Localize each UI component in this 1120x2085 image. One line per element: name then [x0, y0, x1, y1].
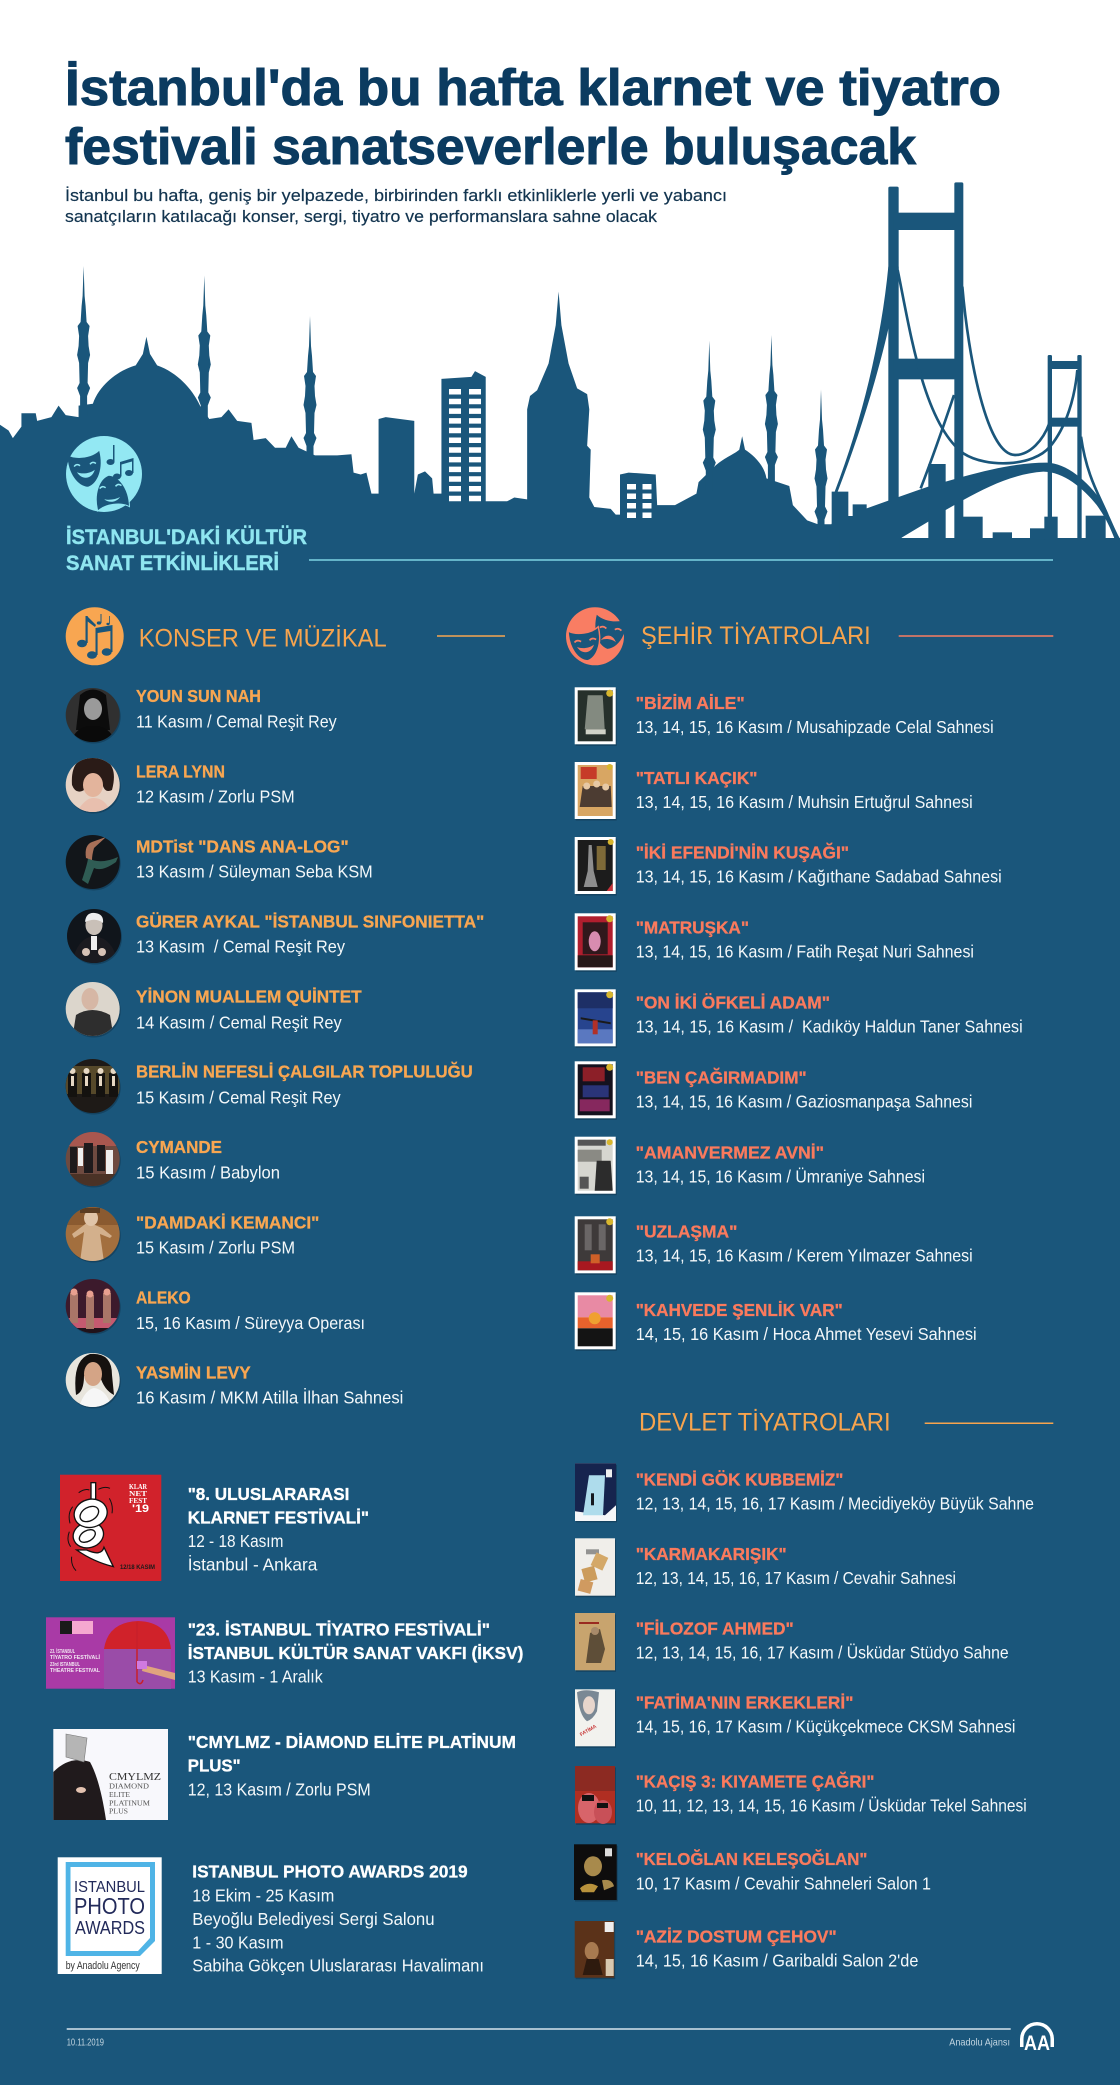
poster: clarinet festival [60, 1475, 161, 1581]
main section heading [66, 526, 1053, 575]
Bosphorus bridge [827, 182, 1120, 540]
item: Lera Lynn: 12 Kasım / Zorlu PSM [136, 786, 295, 806]
building windows [455, 389, 647, 522]
title [65, 59, 1001, 175]
item: Bizim Aile: "BİZİM AİLE" [636, 693, 745, 713]
item: Keloğlan Keleşoğlan [636, 1848, 931, 1893]
item: Aleko: ALEKO [136, 1287, 191, 1307]
item: Uzlaşma [636, 1222, 973, 1266]
poster: Istanbul theatre festival: 23. İSTANBUL [50, 1648, 75, 1655]
item: Berlin wind ensemble: 15 Kasım / Cemal Reşit Rey [136, 1087, 341, 1107]
photo: MDTist [64, 833, 122, 891]
item: Karmakarışık [636, 1544, 956, 1588]
photo: Cymande [64, 1130, 122, 1188]
text: CMYLMZ: "CMYLMZ - DİAMOND ELİTE PLATİNUM [188, 1732, 516, 1752]
item: Aleko [136, 1287, 365, 1333]
poster: On İki Öfkeli Adam [575, 989, 617, 1048]
item: Ben Çağırmadım: 13, 14, 15, 16 Kasım / Gaziosmanpaşa Sahnesi [636, 1092, 972, 1112]
logo: Istanbul Photo Awards: ISTANBUL [74, 1879, 145, 1896]
poster: Keloğlan Keleşoğlan [574, 1844, 618, 1902]
poster: Aziz Dostum Çehov [575, 1921, 615, 1979]
poster: Uzlaşma [575, 1216, 617, 1275]
item: Kendi Gök Kubbemiz: "KENDİ GÖK KUBBEMİZ" [636, 1469, 843, 1489]
item: Lera Lynn: LERA LYNN [136, 761, 225, 781]
intro text: İstanbul bu hafta, geniş bir yelpazede, birbirinden farklı etkinliklerle yerli ve yabancı [65, 186, 727, 205]
poster: CMYLMZ: PLATINUM [109, 1798, 150, 1808]
item: Kaçış 3 [636, 1771, 1027, 1816]
poster: Istanbul theatre festival: TİYATRO FESTİVALİ [50, 1654, 101, 1661]
item: Aziz Dostum Çehov: "AZİZ DOSTUM ÇEHOV" [636, 1927, 837, 1947]
poster: Istanbul theatre festival: THEATRE FESTIVAL [50, 1668, 100, 1674]
item: Tatlı Kaçık [636, 768, 973, 812]
item: İki Efendi: 13, 14, 15, 16 Kasım / Kağıthane Sadabad Sahnesi [636, 867, 1002, 887]
panel: concerts and musicals [64, 607, 505, 1410]
title: İstanbul'da bu hafta klarnet ve tiyatro [65, 59, 1001, 116]
item: Youn Sun Nah: YOUN SUN NAH [136, 686, 261, 706]
icon: theatre masks [566, 607, 627, 665]
item: Damdaki Kemancı: "DAMDAKİ KEMANCI" [136, 1212, 319, 1232]
icon: music notes [66, 607, 124, 665]
poster: Kendi Gök Kubbemiz [575, 1463, 617, 1522]
poster: clarinet festival: FEST [129, 1496, 147, 1505]
item: Aziz Dostum Çehov [636, 1927, 918, 1971]
item: Cymande [136, 1137, 280, 1183]
poster: Matruşka [575, 913, 617, 972]
item: Fatima'nın Erkekleri [636, 1693, 1015, 1737]
item: Matruşka [636, 918, 974, 962]
photo: Lera Lynn [64, 756, 122, 815]
photo: Youn Sun Nah [64, 686, 122, 745]
poster: İki Efendi [575, 837, 617, 896]
poster: Fatima'nın Erkekleri [575, 1689, 616, 1748]
poster: CMYLMZ [53, 1729, 168, 1820]
main section icon: masks and notes [66, 436, 142, 512]
poster: Istanbul theatre festival: 23rd ISTANBUL [50, 1662, 80, 1668]
logo: Istanbul Photo Awards: by Anadolu Agency [66, 1960, 140, 1972]
logo: Istanbul Photo Awards: AWARDS [75, 1918, 145, 1938]
item: Bizim Aile: 13, 14, 15, 16 Kasım / Musahipzade Celal Sahnesi [636, 717, 994, 737]
text: Istanbul Photo Awards [192, 1862, 484, 1976]
item: Filozof Ahmed: 12, 13, 14, 15, 16, 17 Kasım / Üsküdar Stüdyo Sahne [636, 1643, 1009, 1663]
item: Fatima'nın Erkekleri: "FATİMA'NIN ERKEKLERİ" [636, 1693, 853, 1713]
item: Damdaki Kemancı: 15 Kasım / Zorlu PSM [136, 1238, 295, 1258]
heading: KONSER VE MÜZİKAL: KONSER VE MÜZİKAL [139, 624, 387, 653]
item: Damdaki Kemancı [136, 1212, 319, 1258]
item: Cymande: CYMANDE [136, 1137, 222, 1157]
item: Berlin wind ensemble: BERLİN NEFESLİ ÇALGILAR TOPLULUĞU [136, 1061, 473, 1082]
item: Amanvermez Avni [636, 1143, 925, 1187]
text: Istanbul Photo Awards: 18 Ekim - 25 Kasım [192, 1886, 334, 1906]
item: Yinon Muallem: 14 Kasım / Cemal Reşit Rey [136, 1012, 342, 1032]
item: Yasmin Levy: 16 Kasım / MKM Atilla İlhan Sahnesi [136, 1388, 403, 1408]
item: MDTist [136, 837, 373, 882]
logo: Istanbul Photo Awards [58, 1857, 162, 1974]
text: clarinet festival [188, 1484, 369, 1574]
item: Gürer Aykal: GÜRER AYKAL "İSTANBUL SINFONIETTA" [136, 912, 484, 932]
item: Yasmin Levy [136, 1363, 403, 1408]
item: Kahvede Şenlik Var [636, 1300, 977, 1344]
item: Ben Çağırmadım [636, 1067, 972, 1112]
text: clarinet festival: 12 - 18 Kasım [188, 1531, 283, 1551]
panel: festivals and special events [46, 1475, 523, 1976]
item: Bizim Aile [636, 693, 994, 737]
poster: CMYLMZ: PLUS [109, 1806, 128, 1816]
item: Matruşka: 13, 14, 15, 16 Kasım / Fatih Reşat Nuri Sahnesi [636, 942, 974, 962]
photo: Yinon Muallem [66, 982, 121, 1038]
item: Lera Lynn [136, 761, 295, 806]
item: Yinon Muallem: YİNON MUALLEM QUİNTET [136, 987, 362, 1007]
item: Kendi Gök Kubbemiz [636, 1469, 1034, 1513]
item: Youn Sun Nah: 11 Kasım / Cemal Reşit Rey [136, 712, 337, 732]
text: clarinet festival: "8. ULUSLARARASI [188, 1484, 349, 1504]
item: Gürer Aykal [136, 912, 484, 957]
item: Tatlı Kaçık: 13, 14, 15, 16 Kasım / Muhsin Ertuğrul Sahnesi [636, 792, 973, 812]
item: Matruşka: "MATRUŞKA" [636, 918, 749, 938]
poster: Tatlı Kaçık [575, 762, 617, 820]
intro text: sanatçıların katılacağı konser, sergi, tiyatro ve performanslara sahne olacak [65, 207, 658, 226]
item: Keloğlan Keleşoğlan: "KELOĞLAN KELEŞOĞLAN" [636, 1848, 867, 1869]
item: Kaçış 3: "KAÇIŞ 3: KIYAMETE ÇAĞRI" [636, 1771, 874, 1792]
text: CMYLMZ [188, 1732, 516, 1799]
main section heading: İSTANBUL'DAKİ KÜLTÜR [66, 526, 307, 549]
item: Filozof Ahmed: "FİLOZOF AHMED" [636, 1619, 794, 1639]
item: Kaçış 3: 10, 11, 12, 13, 14, 15, 16 Kasım / Üsküdar Tekel Sahnesi [636, 1796, 1027, 1816]
date: 10.11.2019 [67, 2037, 104, 2049]
poster: Amanvermez Avni [575, 1137, 617, 1195]
item: Uzlaşma: "UZLAŞMA" [636, 1222, 737, 1242]
item: Kahvede Şenlik Var: 14, 15, 16 Kasım / Hoca Ahmet Yesevi Sahnesi [636, 1324, 977, 1344]
item: Ben Çağırmadım: "BEN ÇAĞIRMADIM" [636, 1067, 807, 1088]
item: Aziz Dostum Çehov: 14, 15, 16 Kasım / Garibaldi Salon 2'de [636, 1951, 918, 1971]
poster: Kaçış 3 [575, 1766, 616, 1825]
text: clarinet festival: KLARNET FESTİVALİ" [188, 1507, 369, 1527]
item: Yasmin Levy: YASMİN LEVY [136, 1363, 251, 1383]
poster: CMYLMZ: DIAMOND [109, 1782, 150, 1790]
text: Istanbul theatre festival [188, 1619, 523, 1686]
text: Istanbul Photo Awards: ISTANBUL PHOTO AWARDS 2019 [192, 1862, 468, 1882]
logo: Istanbul Photo Awards: PHOTO [74, 1893, 145, 1919]
item: Amanvermez Avni: 13, 14, 15, 16 Kasım / Ümraniye Sahnesi [636, 1167, 925, 1187]
item: Aleko: 15, 16 Kasım / Süreyya Operası [136, 1313, 365, 1333]
photo: Gürer Aykal [67, 909, 122, 964]
item: Fatima'nın Erkekleri: 14, 15, 16, 17 Kasım / Küçükçekmece CKSM Sahnesi [636, 1717, 1015, 1737]
item: Filozof Ahmed [636, 1619, 1009, 1663]
title: festivali sanatseverlerle buluşacak [65, 118, 917, 175]
footer [67, 2022, 1054, 2055]
item: On İki Öfkeli Adam [636, 993, 1023, 1037]
poster: Bizim Aile [575, 687, 617, 746]
photo: Berlin wind ensemble [64, 1057, 122, 1115]
poster: CMYLMZ: ELITE [109, 1790, 130, 1799]
source: Anadolu Ajansı [949, 2037, 1010, 2049]
text: Istanbul theatre festival: "23. İSTANBUL TİYATRO FESTİVALİ" [188, 1619, 490, 1639]
text: Istanbul Photo Awards: Beyoğlu Belediyesi Sergi Salonu [192, 1909, 435, 1929]
poster: Istanbul theatre festival [46, 1617, 175, 1689]
text: Istanbul Photo Awards: Sabiha Gökçen Uluslararası Havalimanı [192, 1956, 484, 1976]
item: Berlin wind ensemble [136, 1061, 473, 1107]
poster: Fatima'nın Erkekleri: FATİMA [578, 1723, 598, 1738]
item: Yinon Muallem [136, 987, 362, 1032]
item: Cymande: 15 Kasım / Babylon [136, 1163, 280, 1183]
item: Kendi Gök Kubbemiz: 12, 13, 14, 15, 16, 17 Kasım / Mecidiyeköy Büyük Sahne [636, 1493, 1034, 1513]
item: On İki Öfkeli Adam: 13, 14, 15, 16 Kasım / Kadıköy Haldun Taner Sahnesi [636, 1017, 1023, 1037]
poster: clarinet festival: 12/18 KASIM [120, 1564, 155, 1571]
poster: Karmakarışık [575, 1538, 616, 1597]
photo: Damdaki Kemancı [64, 1205, 122, 1263]
text: Istanbul Photo Awards: 1 - 30 Kasım [192, 1932, 284, 1952]
item: Karmakarışık: "KARMAKARIŞIK" [636, 1544, 787, 1564]
item: Karmakarışık: 12, 13, 14, 15, 16, 17 Kasım / Cevahir Sahnesi [636, 1568, 956, 1588]
text: CMYLMZ: 12, 13 Kasım / Zorlu PSM [188, 1779, 371, 1799]
panel: city theatres [566, 607, 1053, 1351]
item: On İki Öfkeli Adam: "ON İKİ ÖFKELİ ADAM" [636, 993, 830, 1013]
panel: state theatres [574, 1408, 1053, 1979]
poster: Kahvede Şenlik Var [575, 1292, 617, 1351]
item: İki Efendi [636, 842, 1002, 887]
item: Uzlaşma: 13, 14, 15, 16 Kasım / Kerem Yılmazer Sahnesi [636, 1246, 973, 1266]
item: Youn Sun Nah [136, 686, 337, 732]
poster: clarinet festival: KLAR [129, 1482, 147, 1491]
intro text [65, 186, 727, 226]
photo: Yasmin Levy [64, 1351, 122, 1410]
poster: Filozof Ahmed [575, 1613, 616, 1672]
poster: clarinet festival: NET [129, 1489, 147, 1498]
text: clarinet festival: İstanbul - Ankara [188, 1554, 318, 1574]
main section heading: SANAT ETKİNLİKLERİ [66, 552, 279, 575]
logo: Anadolu Agency [1020, 2022, 1054, 2055]
item: MDTist: MDTist "DANS ANA-LOG" [136, 837, 349, 857]
text: Istanbul theatre festival: 13 Kasım - 1 Aralık [188, 1666, 323, 1686]
item: Gürer Aykal: 13 Kasım / Cemal Reşit Rey [136, 937, 345, 957]
heading: DEVLET TİYATROLARI: DEVLET TİYATROLARI [639, 1408, 891, 1437]
item: Amanvermez Avni: "AMANVERMEZ AVNİ" [636, 1143, 824, 1163]
item: Tatlı Kaçık: "TATLI KAÇIK" [636, 768, 757, 788]
logo: Anadolu Agency: AA [1024, 2032, 1050, 2055]
text: Istanbul theatre festival: İSTANBUL KÜLTÜR SANAT VAKFI (İKSV) [188, 1643, 523, 1663]
text: CMYLMZ: PLUS" [188, 1755, 241, 1775]
photo: Aleko [64, 1277, 122, 1336]
item: MDTist: 13 Kasım / Süleyman Seba KSM [136, 862, 373, 882]
item: İki Efendi: "İKİ EFENDİ'NİN KUŞAĞI" [636, 842, 849, 863]
poster: CMYLMZ: CMYLMZ [109, 1771, 161, 1783]
poster: Ben Çağırmadım [575, 1061, 617, 1120]
heading: ŞEHİR TİYATROLARI: ŞEHİR TİYATROLARI [641, 621, 871, 650]
item: Keloğlan Keleşoğlan: 10, 17 Kasım / Cevahir Sahneleri Salon 1 [636, 1873, 931, 1893]
poster: clarinet festival: '19 [132, 1503, 149, 1515]
item: Kahvede Şenlik Var: "KAHVEDE ŞENLİK VAR" [636, 1300, 843, 1320]
